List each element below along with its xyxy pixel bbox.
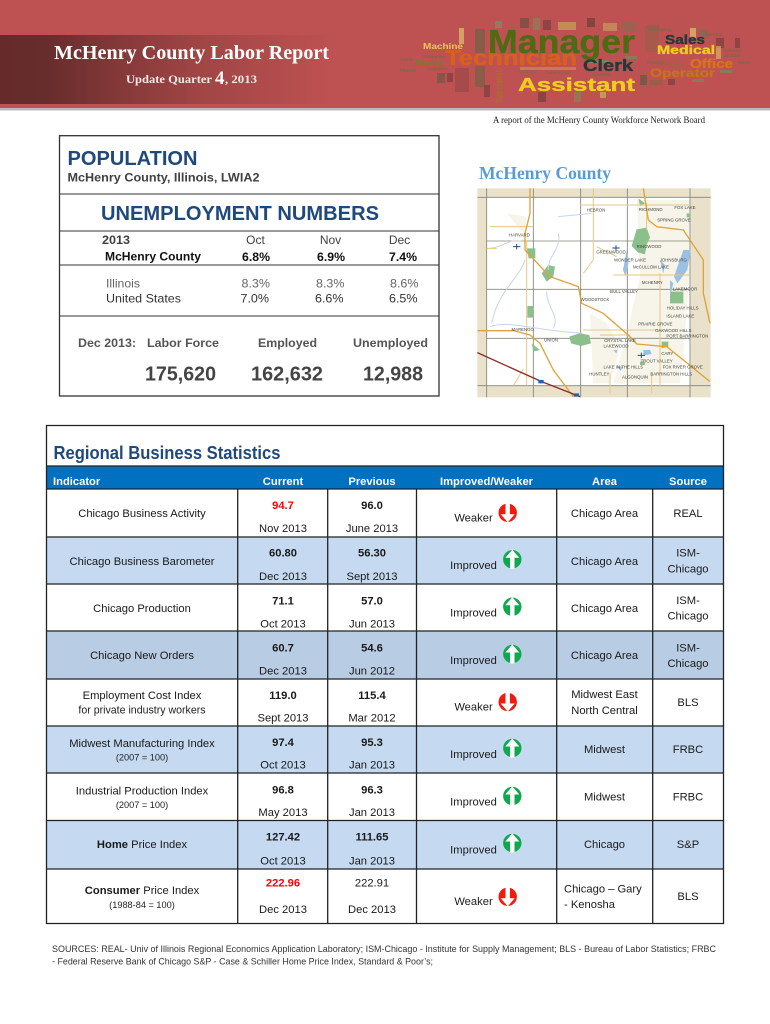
row: Chicago Business Activity: REAL bbox=[673, 508, 703, 520]
row: Chicago Business Activity: 96.0 bbox=[361, 500, 383, 512]
row: Industrial Production Index: Midwest bbox=[584, 792, 626, 804]
row: Chicago New Orders: Chicago Area bbox=[571, 650, 639, 662]
labor force labels: Labor Force bbox=[147, 336, 219, 350]
unemployment table: McHenry County: 6.8% bbox=[242, 250, 270, 264]
labor force labels bbox=[78, 336, 428, 350]
place names: BULL VALLEY bbox=[610, 289, 638, 294]
job title word cloud: Operator bbox=[650, 66, 715, 80]
job title word cloud: Service bbox=[706, 32, 723, 37]
row: Home Price Index: 127.42 bbox=[266, 832, 300, 844]
row: Consumer Price Index: BLS bbox=[677, 891, 699, 903]
row: Consumer Price Index: Dec 2013 bbox=[348, 904, 396, 916]
row: Employment Cost Index: 119.0 bbox=[269, 690, 297, 702]
unemployment table: year and months: Nov bbox=[320, 233, 341, 247]
row: Chicago Business Barometer bbox=[70, 548, 709, 583]
row: Home Price Index: S&P bbox=[677, 839, 699, 851]
report subtitle: 4 bbox=[215, 68, 225, 89]
job title word cloud: Nurse bbox=[738, 60, 751, 65]
unemployment table: Illinois: 8.3% bbox=[316, 277, 345, 291]
labor force labels: Employed bbox=[258, 336, 317, 350]
job title word cloud: Medical bbox=[657, 43, 715, 57]
report title: McHenry County Labor Report bbox=[54, 42, 329, 64]
row: Chicago Production: Improved bbox=[450, 608, 497, 620]
unemployment table: Illinois: 8.3% bbox=[242, 277, 270, 291]
row: Chicago Business Barometer: ISM- bbox=[676, 548, 700, 560]
row: Industrial Production Index: FRBC bbox=[673, 792, 703, 804]
labor force labels: Dec 2013: bbox=[78, 336, 136, 350]
row: Midwest Manufacturing Index bbox=[69, 737, 703, 772]
unemployment heading: UNEMPLOYMENT NUMBERS bbox=[101, 203, 379, 225]
place names: RINGWOOD bbox=[637, 244, 661, 249]
job title word cloud bbox=[400, 18, 751, 103]
place names: LAKEWOOD bbox=[603, 344, 629, 349]
job title word cloud: Builder bbox=[725, 53, 741, 58]
place names: LAKE IN THE HILLS bbox=[604, 365, 643, 370]
place names: WOODSTOCK bbox=[581, 297, 609, 302]
row: Employment Cost Index: for private industry workers bbox=[78, 705, 206, 717]
unemployment table: year and months: Oct bbox=[246, 233, 265, 247]
airport markers bbox=[513, 244, 645, 358]
job title word cloud: Machine bbox=[423, 42, 464, 51]
row: Chicago New Orders: 54.6 bbox=[361, 642, 383, 654]
place names: PRAIRIE GROVE bbox=[638, 322, 673, 327]
sources note bbox=[52, 944, 716, 968]
row: Employment Cost Index: Sept 2013 bbox=[257, 713, 309, 725]
row: Industrial Production Index: Jan 2013 bbox=[349, 807, 395, 819]
row: Chicago Business Barometer: Sept 2013 bbox=[346, 571, 398, 583]
place names: CRYSTAL LAKE bbox=[604, 338, 636, 343]
job title word cloud: Sales bbox=[665, 32, 705, 47]
job title word cloud: Office bbox=[690, 56, 733, 71]
place names: OAKWOOD HILLS bbox=[655, 328, 692, 333]
row: Consumer Price Index: Dec 2013 bbox=[259, 904, 307, 916]
row: Industrial Production Index: 96.3 bbox=[361, 784, 383, 796]
labor force numbers bbox=[145, 364, 423, 386]
row: Industrial Production Index: 96.8 bbox=[272, 784, 294, 796]
row: Chicago New Orders bbox=[90, 642, 709, 678]
table header: Area bbox=[592, 476, 618, 488]
place names: GREENWOOD bbox=[596, 250, 626, 255]
population heading: POPULATION bbox=[68, 148, 198, 170]
row: Chicago Business Barometer: Dec 2013 bbox=[259, 571, 307, 583]
place names: JOHNSBURG bbox=[660, 258, 688, 263]
row: Chicago New Orders: Chicago bbox=[667, 658, 709, 670]
unemployment table: United States: 6.5% bbox=[389, 292, 418, 306]
job title word cloud: Checker bbox=[647, 60, 665, 65]
row: Home Price Index: Jan 2013 bbox=[349, 856, 395, 868]
place names: BARRINGTON HILLS bbox=[650, 371, 692, 376]
row: Consumer Price Index: Chicago – Gary bbox=[564, 884, 642, 896]
place names: HOLIDAY HILLS bbox=[667, 306, 699, 311]
place names: LAKEMOOR bbox=[673, 287, 697, 292]
row: Chicago Production: Oct 2013 bbox=[260, 618, 306, 630]
place names: CARY bbox=[661, 351, 673, 356]
row: Chicago New Orders: Improved bbox=[450, 655, 497, 667]
row: Employment Cost Index: Midwest East bbox=[571, 689, 639, 701]
row: Chicago Business Barometer: 56.30 bbox=[358, 548, 386, 560]
row: Home Price Index: Improved bbox=[450, 844, 497, 856]
job title word cloud: Technology bbox=[648, 27, 673, 32]
unemployment table: United States: United States bbox=[106, 292, 181, 306]
unemployment table: year and months: Dec bbox=[389, 233, 410, 247]
row: Chicago New Orders: Chicago New Orders bbox=[90, 650, 194, 662]
job title word cloud: Assistant bbox=[518, 75, 635, 95]
row: Consumer Price Index: (1988-84 = 100) bbox=[109, 900, 175, 910]
job title word cloud: Nurse bbox=[415, 59, 444, 68]
sources note: - Federal Reserve Bank of Chicago S&P - Case & Schiller Home Price Index, Standard & Poor’s; bbox=[52, 957, 433, 968]
population heading bbox=[68, 148, 260, 185]
table header: Previous bbox=[348, 476, 396, 488]
unemployment table: United States bbox=[106, 292, 418, 306]
row: Employment Cost Index bbox=[78, 689, 699, 725]
row: Midwest Manufacturing Index: Jan 2013 bbox=[349, 760, 395, 772]
place names: RICHMOND bbox=[639, 207, 663, 212]
row: Consumer Price Index: Weaker bbox=[454, 896, 493, 908]
row: Employment Cost Index: Employment Cost Index bbox=[83, 690, 202, 702]
row: Chicago New Orders: 60.7 bbox=[272, 642, 294, 654]
table header: Indicator bbox=[53, 476, 101, 488]
panel: regional business statistics bbox=[46, 426, 724, 924]
row: Chicago Business Activity bbox=[78, 500, 703, 535]
job title word cloud: Specialist bbox=[494, 70, 504, 103]
row: Midwest Manufacturing Index: 97.4 bbox=[272, 737, 295, 749]
unemployment table: McHenry County: 7.4% bbox=[389, 250, 417, 264]
row: Home Price Index: Oct 2013 bbox=[260, 856, 306, 868]
panel heading: Regional Business Statistics bbox=[54, 443, 280, 463]
report attribution line: A report of the McHenry County Workforce Network Board bbox=[493, 115, 705, 125]
place names: McHENRY bbox=[642, 280, 663, 285]
job title word cloud: Clerk bbox=[583, 56, 634, 75]
row: Chicago Production: 71.1 bbox=[272, 595, 294, 607]
table header: Improved/Weaker bbox=[440, 476, 534, 488]
table header: Current bbox=[263, 476, 303, 488]
place names: HARVARD bbox=[509, 232, 530, 237]
row: Chicago New Orders: Jun 2012 bbox=[349, 666, 395, 678]
row: Employment Cost Index: 115.4 bbox=[358, 690, 386, 702]
report subtitle: , 2013 bbox=[225, 72, 257, 86]
row: Employment Cost Index: BLS bbox=[677, 697, 699, 709]
job title word cloud: Planner bbox=[400, 68, 417, 73]
row: Industrial Production Index: (2007 = 100) bbox=[116, 800, 168, 810]
job title word cloud: Competitor bbox=[422, 54, 446, 59]
row: Chicago Production: ISM- bbox=[676, 595, 700, 607]
row: Chicago Business Activity: June 2013 bbox=[346, 523, 398, 535]
unemployment table: Illinois bbox=[106, 277, 419, 291]
place names: McCULLOM LAKE bbox=[633, 265, 669, 270]
place names: ALGONQUIN bbox=[622, 375, 648, 380]
job title word cloud: Logistics bbox=[428, 66, 448, 71]
row: Industrial Production Index: May 2013 bbox=[258, 807, 308, 819]
report subtitle bbox=[126, 68, 257, 89]
unemployment table: McHenry County bbox=[105, 250, 417, 264]
place names: HUNTLEY bbox=[589, 371, 610, 376]
row: Chicago Business Barometer: 60.80 bbox=[269, 548, 297, 560]
row: Chicago Business Barometer: Chicago Area bbox=[571, 556, 639, 568]
place names: ISLAND LAKE bbox=[666, 313, 694, 318]
unemployment table: year and months bbox=[102, 233, 410, 247]
row: Employment Cost Index: Weaker bbox=[454, 702, 493, 714]
row: Midwest Manufacturing Index: Midwest bbox=[584, 744, 626, 756]
labor force labels: Unemployed bbox=[353, 336, 428, 350]
header banner bbox=[0, 0, 770, 110]
job title word cloud: Software bbox=[723, 48, 743, 53]
row: Chicago Production: Chicago bbox=[667, 611, 709, 623]
job title word cloud: Agent bbox=[400, 57, 413, 62]
row: Industrial Production Index: Improved bbox=[450, 797, 497, 809]
place names: MARENGO bbox=[511, 327, 534, 332]
labor force numbers: 12,988 bbox=[363, 364, 423, 386]
row: Home Price Index: Home Price Index bbox=[97, 839, 187, 851]
row: Chicago Business Activity: Nov 2013 bbox=[259, 523, 307, 535]
row: Chicago Business Activity: 94.7 bbox=[272, 500, 294, 512]
row: Midwest Manufacturing Index: 95.3 bbox=[361, 737, 383, 749]
row: Home Price Index: 111.65 bbox=[356, 832, 388, 844]
job title word cloud: Manager bbox=[488, 23, 635, 60]
row: Midwest Manufacturing Index: FRBC bbox=[673, 744, 703, 756]
row: Consumer Price Index: - Kenosha bbox=[564, 899, 616, 911]
row: Consumer Price Index bbox=[85, 878, 699, 916]
row: Chicago Production: Jun 2013 bbox=[349, 618, 395, 630]
row: Chicago Business Activity: Chicago Area bbox=[571, 508, 639, 520]
panel: population and unemployment bbox=[60, 136, 439, 396]
row: Midwest Manufacturing Index: (2007 = 100) bbox=[116, 753, 168, 763]
map heading: McHenry County bbox=[479, 163, 611, 183]
labor force numbers: 175,620 bbox=[145, 364, 216, 386]
job title word cloud: Retail bbox=[647, 24, 659, 29]
row: Employment Cost Index: Mar 2012 bbox=[348, 713, 396, 725]
sources note: SOURCES: REAL- Univ of Illinois Regional Economics Application Laboratory; ISM-Chicago - Institute for Supply Management; BLS - Bureau of Labor Statistics; FRBC bbox=[52, 944, 716, 955]
labor force numbers: 162,632 bbox=[251, 364, 323, 386]
row: Chicago Business Barometer: Improved bbox=[450, 560, 497, 572]
row: Chicago New Orders: ISM- bbox=[676, 642, 700, 654]
place names: WONDER LAKE bbox=[614, 257, 646, 262]
place names: SPRING GROVE bbox=[657, 217, 691, 222]
unemployment table: McHenry County: McHenry County bbox=[105, 250, 201, 264]
place names: PORT BARRINGTON bbox=[666, 333, 708, 338]
row: Chicago Business Barometer: Chicago Business Barometer bbox=[70, 556, 215, 568]
row: Chicago Business Barometer: Chicago bbox=[667, 563, 709, 575]
job title word cloud: Systems bbox=[592, 72, 611, 77]
place names bbox=[509, 205, 708, 380]
unemployment table: Illinois: 8.6% bbox=[390, 277, 419, 291]
unemployment table: United States: 7.0% bbox=[240, 292, 269, 306]
place names: TROUT VALLEY bbox=[641, 359, 673, 364]
row: Industrial Production Index bbox=[76, 784, 703, 819]
row: Chicago Production: Chicago Production bbox=[93, 603, 191, 615]
parks and lakes bbox=[490, 198, 691, 371]
row: Industrial Production Index: Industrial Production Index bbox=[76, 785, 209, 797]
row: Employment Cost Index: North Central bbox=[571, 705, 638, 717]
row: Chicago Production bbox=[93, 595, 709, 630]
unemployment table: year and months: 2013 bbox=[102, 233, 130, 247]
row: Midwest Manufacturing Index: Improved bbox=[450, 749, 497, 761]
row: Chicago Production: Chicago Area bbox=[571, 603, 639, 615]
row: Consumer Price Index: 222.96 bbox=[266, 878, 300, 890]
job title word cloud: Architect bbox=[518, 69, 538, 74]
row: Chicago Production: 57.0 bbox=[361, 595, 383, 607]
place names: FOX LAKE bbox=[674, 205, 696, 210]
row: Home Price Index bbox=[97, 832, 699, 868]
place names: UNION bbox=[544, 337, 558, 342]
population heading: McHenry County, Illinois, LWIA2 bbox=[68, 171, 260, 185]
job title word cloud: Commercial bbox=[545, 70, 571, 75]
row: Consumer Price Index: Consumer Price Index bbox=[85, 885, 200, 897]
table header: Source bbox=[669, 476, 707, 488]
row: Consumer Price Index: 222.91 bbox=[355, 878, 389, 890]
map of McHenry County bbox=[477, 188, 711, 397]
row: Midwest Manufacturing Index: Midwest Manufacturing Index bbox=[69, 738, 215, 750]
roads bbox=[477, 188, 710, 397]
row: Chicago Business Activity: Weaker bbox=[454, 513, 493, 525]
row: Chicago New Orders: Dec 2013 bbox=[259, 666, 307, 678]
row: Home Price Index: Chicago bbox=[584, 839, 625, 851]
place names: FOX RIVER GROVE bbox=[663, 364, 703, 369]
place names: HEBRON bbox=[587, 208, 605, 213]
unemployment table: United States: 6.6% bbox=[315, 292, 344, 306]
job title word cloud: Technician bbox=[445, 47, 577, 70]
row backgrounds bbox=[46, 537, 724, 869]
row: Midwest Manufacturing Index: Oct 2013 bbox=[260, 760, 306, 772]
report subtitle: Update Quarter bbox=[126, 72, 213, 86]
unemployment table: Illinois: Illinois bbox=[106, 277, 140, 291]
table header bbox=[46, 466, 724, 489]
unemployment table: McHenry County: 6.9% bbox=[317, 250, 345, 264]
row: Chicago Business Activity: Chicago Business Activity bbox=[78, 508, 206, 520]
